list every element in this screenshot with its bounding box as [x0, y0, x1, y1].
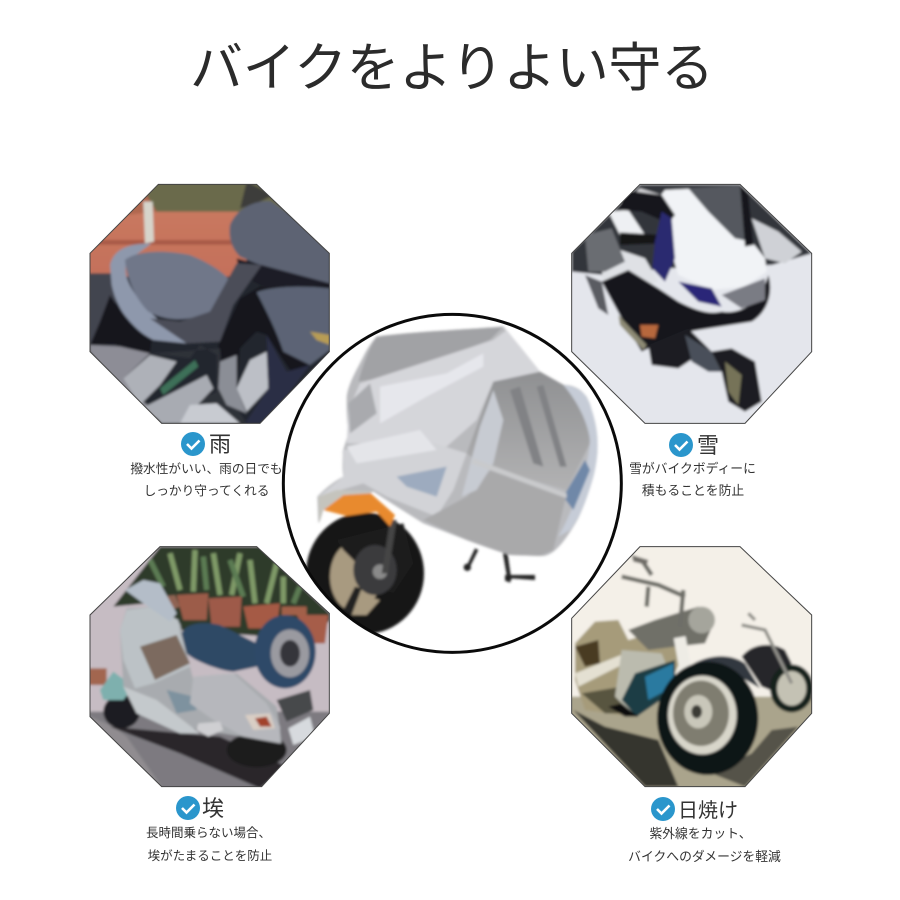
rain description: [130, 462, 283, 498]
dust description: 長時間乗らない場合、: [146, 826, 271, 840]
dust description: [146, 826, 272, 863]
label: rain: [130, 432, 283, 498]
icon: dust check badge: [176, 796, 200, 820]
dust description: 埃がたまることを防止: [148, 848, 272, 863]
kickstand: [464, 548, 535, 583]
label: sunburn: [628, 797, 781, 864]
sunburn heading: 日焼け: [678, 799, 738, 822]
icon: snow check badge: [669, 433, 693, 457]
sunburn description: [628, 826, 781, 864]
photo: rain-wet motorcycle octagon: [90, 184, 330, 424]
label: snow: [629, 433, 756, 498]
photo: cruiser motorcycles in sun octagon: [565, 540, 818, 793]
icon: rain check badge: [181, 432, 205, 456]
rain heading: 雨: [209, 432, 231, 457]
snow heading: 雪: [697, 433, 719, 458]
center circle: covered motorcycle: [283, 314, 621, 652]
title: バイクをよりよい守る: [190, 39, 714, 98]
silver cover body: [317, 327, 598, 556]
snow description: 雪がバイクボディーに: [629, 461, 756, 476]
snow description: [629, 461, 756, 498]
dust heading: 埃: [202, 796, 224, 821]
sunburn description: バイクへのダメージを軽減: [628, 849, 781, 864]
photo: dusty scooter octagon: [90, 546, 330, 788]
front wheel: [306, 513, 424, 634]
icon: sunburn check badge: [651, 797, 675, 821]
photo: snow-covered motorcycle octagon: [565, 175, 818, 428]
snow description: 積もることを防止: [642, 483, 744, 498]
rain description: 撥水性がいい、雨の日でも: [130, 462, 283, 476]
orange fender: [323, 493, 395, 527]
sunburn description: 紫外線をカット、: [649, 826, 752, 841]
label: dust: [146, 796, 272, 863]
rain description: しっかり守ってくれる: [144, 484, 269, 498]
